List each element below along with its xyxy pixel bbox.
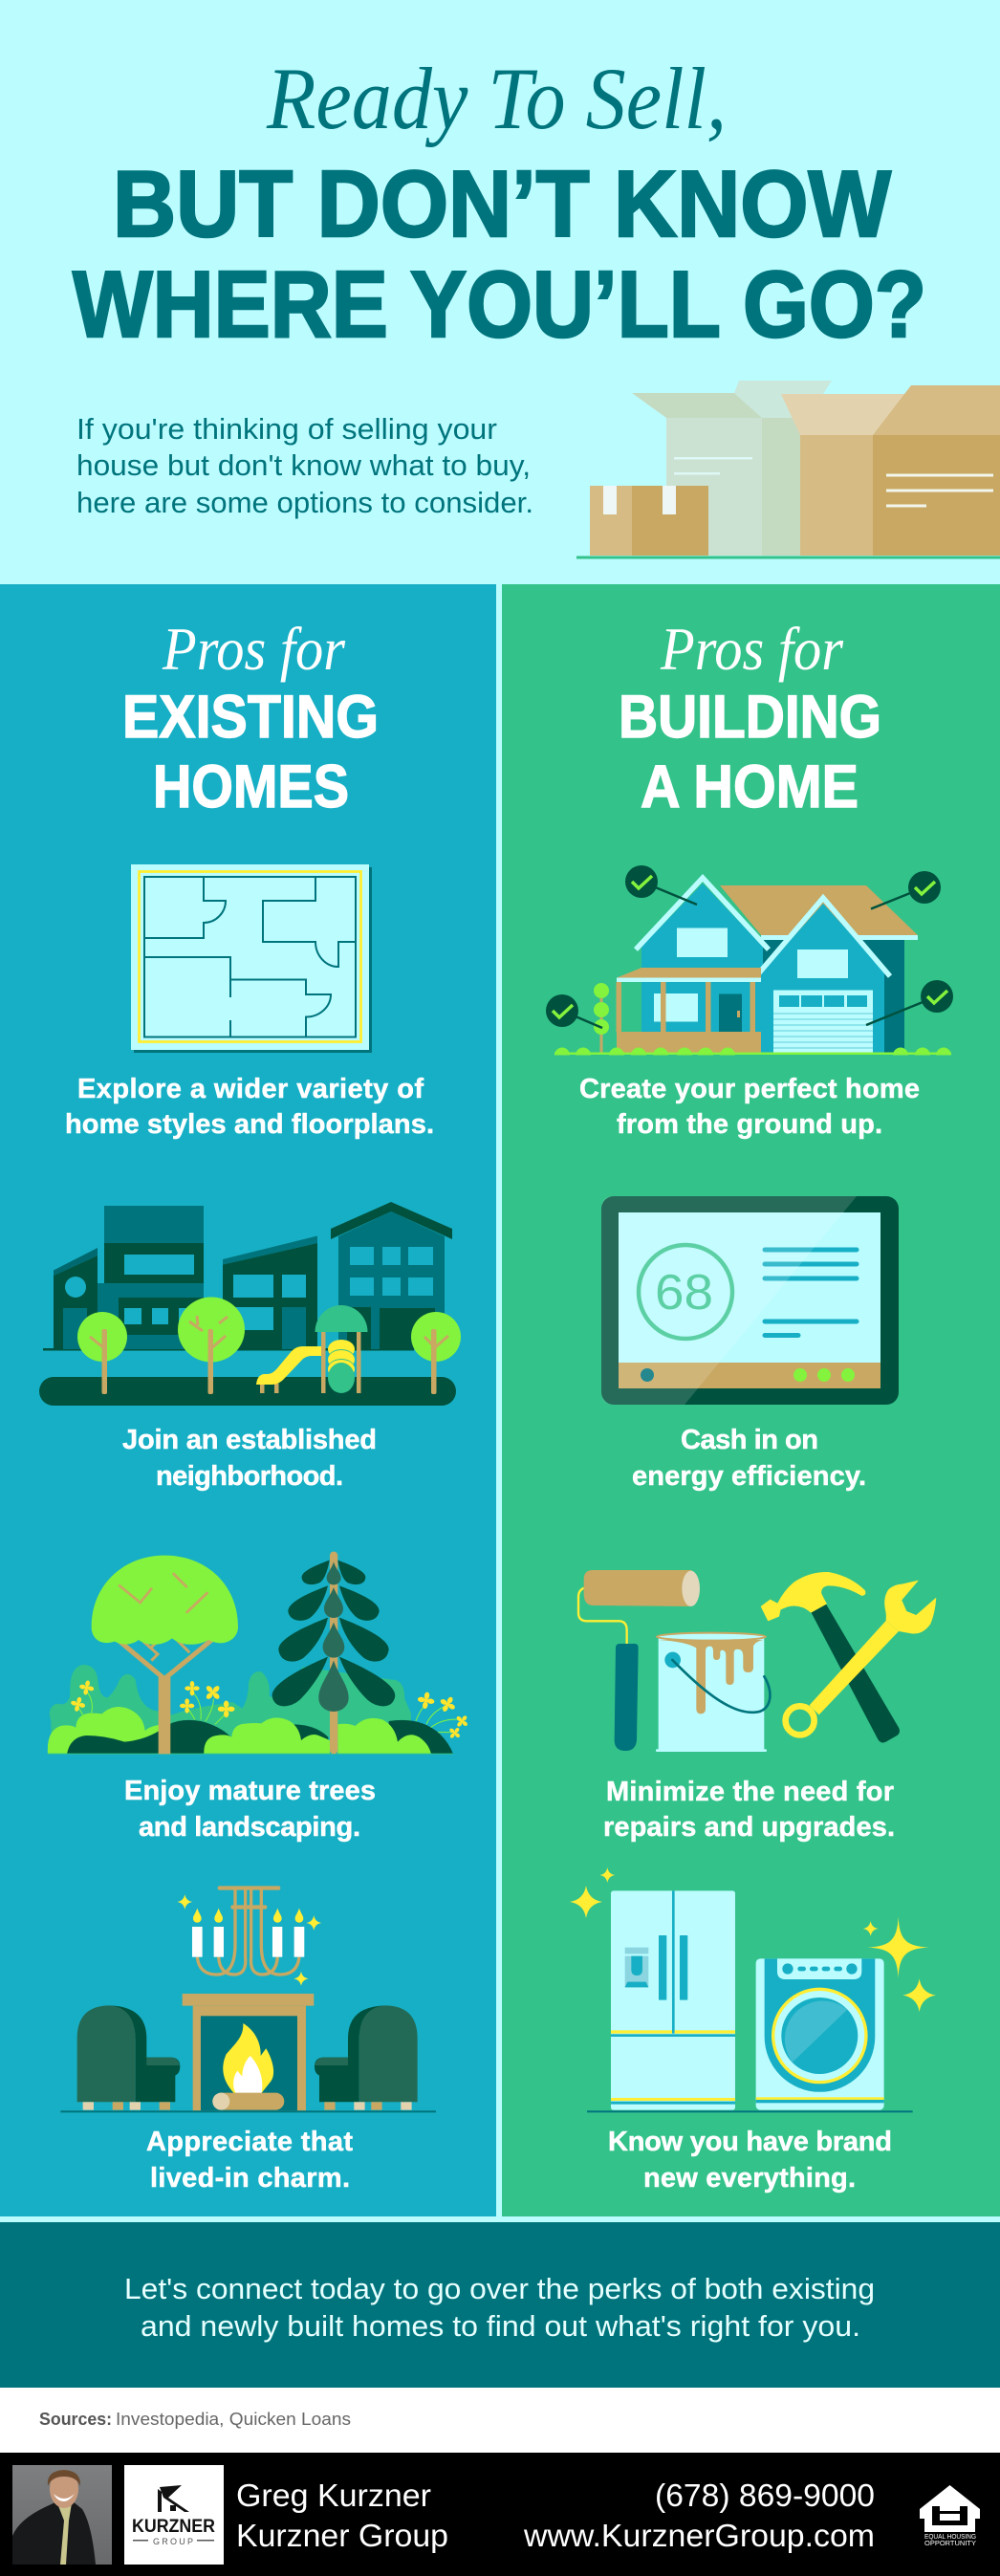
hammer bbox=[761, 1572, 900, 1743]
icon: floor plan bbox=[131, 864, 372, 1053]
caption: repairs: repairs and upgrades. bbox=[603, 1812, 895, 1843]
panel: existing homes bbox=[0, 584, 496, 2216]
title: line one: BUT DON’T KNOW bbox=[113, 151, 891, 256]
icon: fireplace and chandelier bbox=[60, 1886, 436, 2112]
paint roller bbox=[578, 1570, 700, 1751]
contact details bbox=[523, 2478, 875, 2553]
caption: charm bbox=[146, 2127, 353, 2194]
left armchair bbox=[77, 2005, 180, 2110]
contact details: (678) 869-9000 bbox=[655, 2478, 875, 2513]
agent name: Greg Kurzner bbox=[236, 2478, 431, 2513]
intro text: If you're thinking of selling your bbox=[76, 412, 497, 446]
icon: equal housing opportunity: EQUAL HOUSING bbox=[924, 2532, 976, 2541]
Kurzner Group logo: KURZNER bbox=[132, 2517, 215, 2537]
heading: pros for existing homes bbox=[122, 616, 379, 820]
fireplace bbox=[183, 1994, 314, 2110]
sources strip: Sources: bbox=[39, 2410, 112, 2429]
caption: perfect home bbox=[579, 1074, 920, 1140]
heading: pros for existing homes: EXISTING bbox=[122, 684, 379, 751]
icon: equal housing opportunity: OPPORTUNITY bbox=[924, 2539, 976, 2547]
refrigerator bbox=[611, 1890, 735, 2110]
flowers bbox=[69, 1679, 471, 1741]
caption: energy efficiency: energy efficiency. bbox=[632, 1461, 866, 1492]
intro text bbox=[76, 412, 533, 519]
heading: pros for building a home bbox=[619, 616, 881, 820]
caption: charm: lived-in charm. bbox=[150, 2163, 350, 2194]
agent name bbox=[236, 2478, 448, 2553]
caption: floorplans: home styles and floorplans. bbox=[65, 1109, 434, 1140]
panel: building a home bbox=[502, 584, 1000, 2216]
sources strip: Investopedia, Quicken Loans bbox=[116, 2410, 351, 2429]
Kurzner Group logo: GROUP bbox=[153, 2537, 193, 2546]
agent footer bbox=[0, 2453, 1000, 2576]
right bush bbox=[337, 1718, 431, 1754]
caption: energy efficiency bbox=[632, 1425, 866, 1492]
sparkles bbox=[570, 1867, 936, 2012]
left bush bbox=[48, 1707, 169, 1754]
caption: trees: Enjoy mature trees bbox=[124, 1776, 376, 1806]
caption: trees bbox=[124, 1776, 376, 1843]
caption: neighborhood bbox=[122, 1425, 377, 1492]
icon: new appliances bbox=[570, 1867, 936, 2112]
caption: neighborhood: Join an established bbox=[122, 1425, 377, 1455]
pine tree bbox=[272, 1552, 395, 1754]
wrench bbox=[786, 1581, 936, 1735]
Kurzner Group logo bbox=[124, 2465, 224, 2565]
icon: smart thermostat bbox=[601, 1196, 899, 1405]
icon: trees and landscaping bbox=[48, 1552, 471, 1755]
washing machine bbox=[756, 1958, 884, 2110]
caption: energy efficiency: Cash in on bbox=[681, 1425, 818, 1455]
intro text: here are some options to consider. bbox=[76, 486, 533, 519]
caption: trees: and landscaping. bbox=[139, 1812, 360, 1843]
caption: repairs bbox=[603, 1777, 895, 1843]
header panel bbox=[73, 50, 1000, 558]
icon: equal housing opportunity bbox=[920, 2485, 980, 2547]
heading: pros for building a home: A HOME bbox=[641, 753, 859, 820]
caption: perfect home: from the ground up. bbox=[617, 1109, 882, 1140]
title: script line: Ready To Sell, bbox=[266, 50, 727, 147]
caption: floorplans: Explore a wider variety of bbox=[77, 1074, 424, 1104]
chandelier bbox=[177, 1886, 321, 1986]
caption: new everything: Know you have brand bbox=[608, 2127, 892, 2157]
heading: pros for building a home: BUILDING bbox=[619, 684, 881, 751]
icon: house with check marks bbox=[546, 865, 953, 1056]
caption: charm: Appreciate that bbox=[146, 2127, 353, 2157]
icon: paint roller, paint can, hammer and wrench bbox=[578, 1570, 936, 1752]
caption: neighborhood: neighborhood. bbox=[156, 1461, 343, 1492]
sources strip bbox=[0, 2388, 1000, 2453]
mid bush bbox=[204, 1717, 330, 1754]
leafy tree bbox=[92, 1556, 238, 1754]
heading: pros for building a home: Pros for bbox=[660, 616, 843, 683]
closing call to action banner: and newly built homes to find out what's right for you. bbox=[141, 2309, 860, 2343]
caption: new everything: new everything. bbox=[643, 2163, 856, 2194]
intro text: house but don't know what to buy, bbox=[76, 448, 531, 482]
paint can bbox=[656, 1633, 770, 1752]
agent name: Kurzner Group bbox=[236, 2518, 448, 2553]
icon: smart thermostat: 68 bbox=[655, 1265, 713, 1321]
caption: repairs: Minimize the need for bbox=[606, 1777, 894, 1807]
title: line two: WHERE YOU’LL GO? bbox=[73, 251, 926, 357]
dark mounds bbox=[67, 1720, 231, 1754]
caption: perfect home: Create your perfect home bbox=[579, 1074, 920, 1104]
heading: pros for existing homes: HOMES bbox=[153, 753, 349, 820]
icon: neighborhood bbox=[39, 1202, 461, 1406]
icon: moving boxes bbox=[576, 381, 1000, 558]
closing call to action banner: Let's connect today to go over the perks of both existing bbox=[124, 2272, 875, 2305]
closing call to action banner bbox=[0, 2222, 1000, 2388]
heading: pros for existing homes: Pros for bbox=[162, 616, 345, 683]
caption: new everything bbox=[608, 2127, 892, 2194]
right armchair bbox=[315, 2005, 418, 2110]
agent photo bbox=[12, 2465, 112, 2565]
contact details: www.KurznerGroup.com bbox=[523, 2518, 875, 2553]
caption: floorplans bbox=[65, 1074, 434, 1140]
